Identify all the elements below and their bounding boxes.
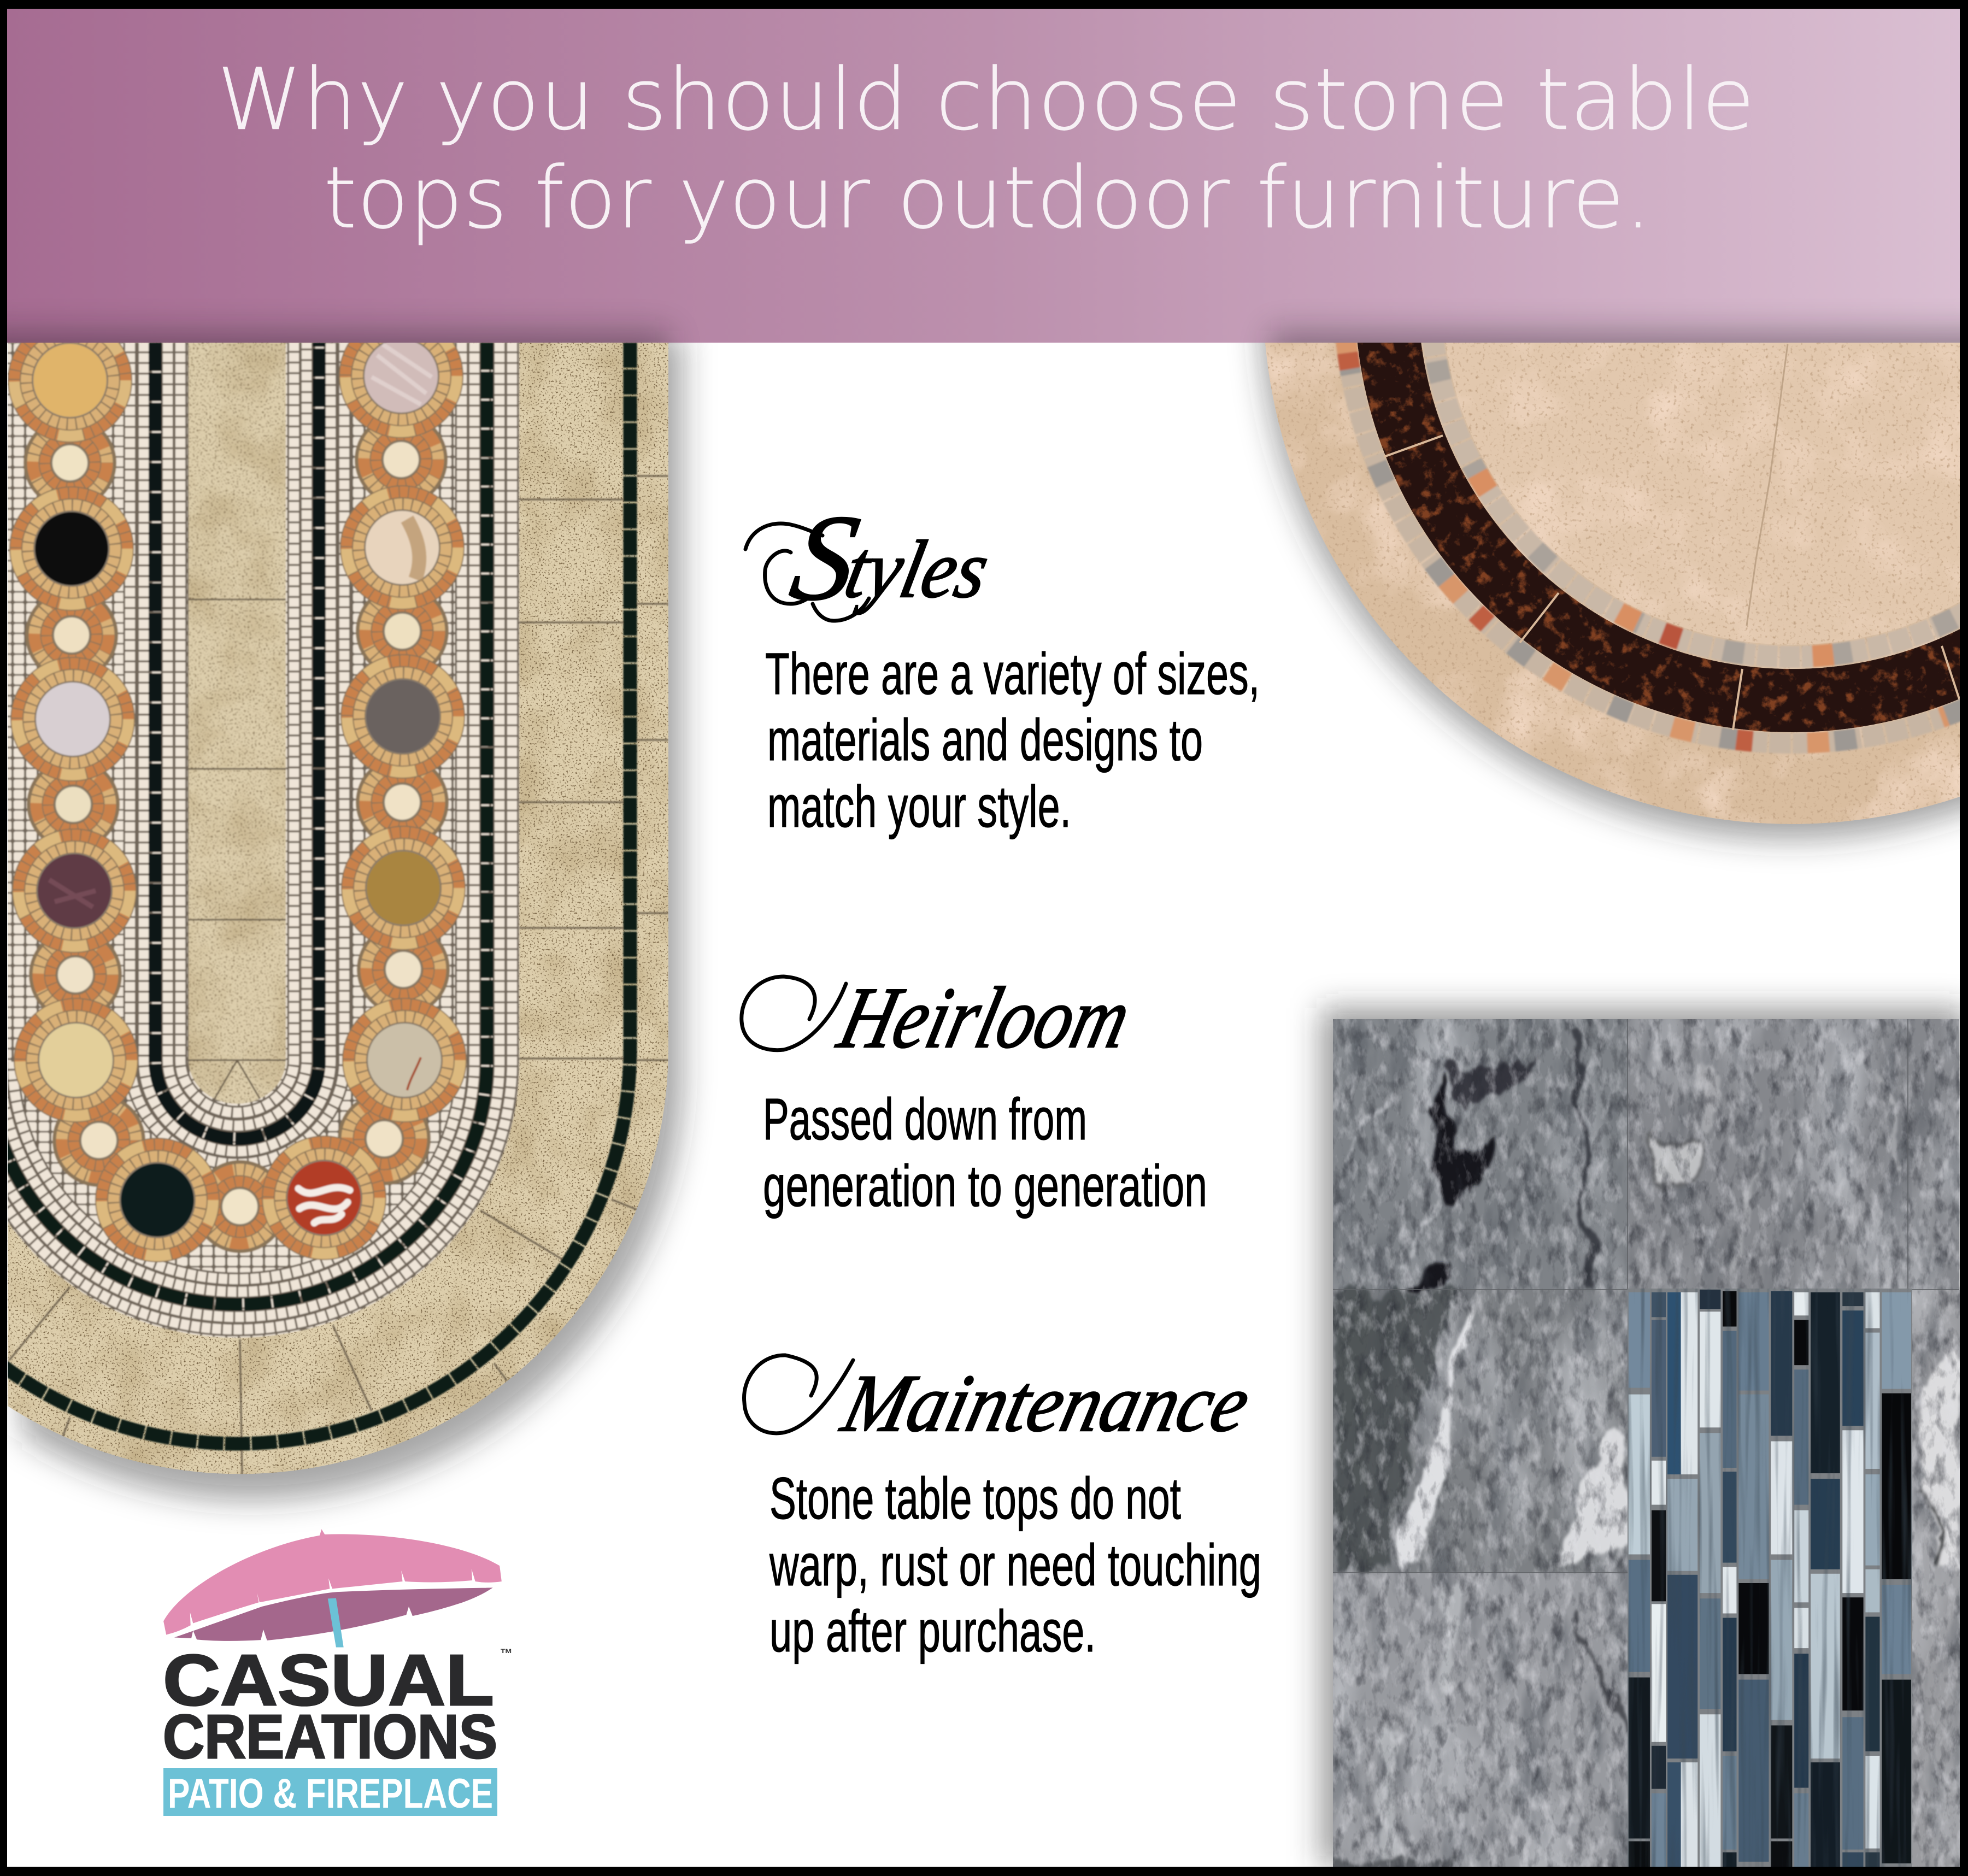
heading: maintenance: Maintenance xyxy=(833,1357,1259,1448)
heading: heirloom xyxy=(742,969,1139,1066)
icon: umbrella xyxy=(163,1529,502,1647)
table stone base xyxy=(8,343,668,1474)
marble grain xyxy=(1333,1019,1960,1867)
tile joints xyxy=(1333,1019,1959,1573)
text: styles body: materials and designs to xyxy=(767,707,1203,773)
title: Why you should choose stone table xyxy=(217,50,1755,149)
banner: patio and fireplace: PATIO & FIREPLACE xyxy=(168,1771,493,1817)
inner black band xyxy=(155,343,319,1139)
marble base tiles xyxy=(1333,1019,1961,1869)
text: maintenance body: Stone table tops do not xyxy=(769,1465,1181,1531)
dark marble band xyxy=(1387,0,1968,701)
outer tesserae rows xyxy=(0,343,512,1330)
section: maintenance xyxy=(744,1355,1261,1664)
panel: tile samples xyxy=(1332,1019,1961,1872)
text: maintenance body: up after purchase. xyxy=(769,1598,1096,1664)
text: maintenance body: warp, rust or need touching xyxy=(769,1532,1261,1598)
panel: oval mosaic table xyxy=(0,314,668,1475)
stone joints xyxy=(9,476,668,1475)
glass mosaic xyxy=(1628,1289,1912,1869)
mosaic field xyxy=(0,343,519,1338)
outer tesserae ring xyxy=(1344,0,1968,743)
panel: header xyxy=(7,9,1960,343)
medallion rings big xyxy=(8,314,467,1262)
wordmark: casual: CASUAL xyxy=(163,1640,494,1720)
text: heirloom body xyxy=(763,1086,1207,1219)
text: styles body: match your style. xyxy=(767,773,1071,839)
shadow: round table xyxy=(1260,0,1968,839)
inner tesserae ring xyxy=(1430,0,1968,657)
inner stone disc xyxy=(1442,0,1968,645)
trademark: TM xyxy=(501,1648,512,1655)
medallion rings small xyxy=(24,413,450,1253)
disc veining xyxy=(49,344,432,1223)
text: styles body xyxy=(765,640,1260,839)
heading: styles: tyles xyxy=(838,524,996,615)
heading: styles: S xyxy=(782,490,868,626)
inner tesserae rows xyxy=(130,343,344,1164)
band joints xyxy=(1384,436,1959,730)
inner stone panel xyxy=(189,343,286,1104)
stone seam xyxy=(1747,344,1788,626)
marble veins xyxy=(1332,1033,1959,1872)
outer stone rim xyxy=(1263,0,1968,824)
section: heirloom xyxy=(742,969,1207,1219)
text: heirloom body: Passed down from xyxy=(763,1086,1087,1152)
shadow: left table xyxy=(16,334,683,1501)
heading: heirloom: Heirloom xyxy=(829,969,1139,1066)
text: styles body: There are a variety of sizes, xyxy=(765,640,1260,707)
outer black band xyxy=(0,343,630,1444)
wordmark: creations: CREATIONS xyxy=(163,1702,497,1771)
title xyxy=(217,50,1755,248)
text: heirloom body: generation to generation xyxy=(763,1152,1207,1219)
text: maintenance body xyxy=(769,1465,1261,1664)
shadow cast on header xyxy=(7,313,1960,343)
medallion discs xyxy=(33,339,442,1237)
mid black band xyxy=(0,343,487,1304)
panel: round stone table xyxy=(1263,0,1968,824)
title: tops for your outdoor furniture. xyxy=(324,148,1652,248)
heading: styles xyxy=(745,490,996,626)
shadow: tile panel xyxy=(1321,1008,1966,1866)
logo: casual creations xyxy=(163,1529,512,1817)
section: styles xyxy=(745,490,1260,839)
